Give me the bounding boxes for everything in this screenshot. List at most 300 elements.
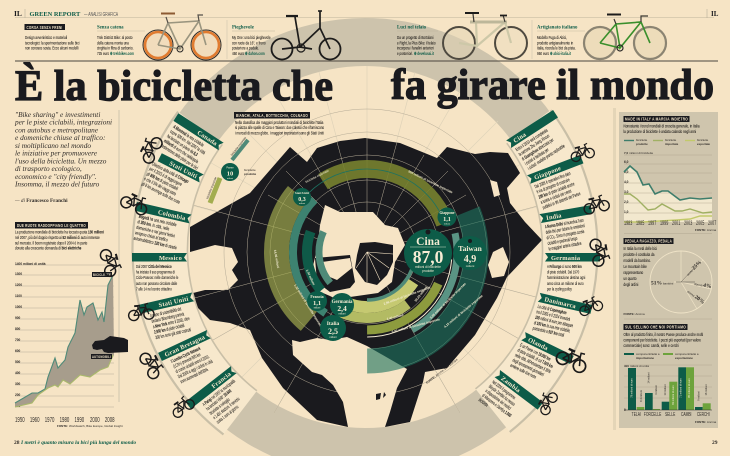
arc: mid teal left [299, 184, 435, 320]
legend for the map arcs: prodotte [244, 172, 256, 176]
arc value labels: 30,23 milioni [414, 285, 428, 303]
production arcs on map [225, 110, 509, 394]
panel: Colombia: domeniche e nei giorni festivi [136, 224, 176, 239]
panel: Giappone [527, 155, 594, 211]
line chart: bicycles vs automobiles: 800 [15, 327, 21, 331]
country circle: Giappone: milioni [444, 224, 451, 226]
header item: Luci nel telaio [397, 26, 438, 56]
header item: Senza catena [97, 26, 145, 56]
country circle: Stati Uniti: Stati Uniti [295, 191, 309, 195]
arc value labels: 2,96 milioni di biciclette esportate [383, 285, 431, 306]
bike: folding black [272, 11, 340, 60]
pie chart: bike types [624, 251, 712, 319]
line chart: Italian production: 2005 [696, 220, 704, 227]
sidebar heading: sul sellino [624, 324, 703, 348]
arc: white line [275, 160, 459, 344]
bar chart: components: 8,4 milioni [639, 390, 643, 402]
label: biciclette [92, 272, 112, 277]
bar chart: components: 14 milioni [646, 372, 650, 383]
panel: India: India [546, 212, 563, 222]
bar chart: components: 300 milioni di unità [624, 364, 649, 368]
pie chart: bike types: 51% bambini [651, 280, 674, 286]
header item: Senza catena: Senza catena [97, 26, 124, 30]
map heading: producers: si piazza alle spalle di Cina e Taiwan: due colossi che riforniscono [235, 124, 325, 130]
khaki ring behind the map [136, 18, 594, 456]
panel: Stati Uniti, Chicago [141, 151, 204, 209]
line chart: bicycles vs automobiles: 500 [15, 360, 21, 364]
sidebar: made in Italy: esportate [697, 142, 710, 146]
map heading: producers [234, 112, 325, 136]
arc: teal right [260, 145, 474, 359]
panel: Stati Uniti, New York: sindaco Bloomberg porterà [151, 311, 185, 324]
map heading: producers: i mercati di mezzo globo. I maggiori importatori sono gli Stati Uniti [235, 130, 324, 136]
header item: Luci nel telaio: e Right, la Plus Bike: il telaio [397, 40, 436, 45]
panel: Danimarca [531, 293, 592, 343]
panel: Giappone: pubblici in 96 distretti del Paese [541, 190, 582, 210]
panel: Canada: copre 500 km. Nel 2007 la città [169, 128, 207, 156]
line chart: bicycles vs automobiles: FONTE: Worldwatch, Bike Europe, Global Insight [57, 424, 123, 428]
bar chart: components: esportazione [675, 356, 693, 360]
chart heading: bikes vs cars [15, 222, 104, 251]
arc: light olive right [274, 159, 460, 345]
country circle: Germania: milioni [338, 312, 346, 316]
legend for the map arcs: Paese [226, 166, 234, 170]
line chart: Italian production: 2003 [684, 220, 692, 227]
sidebar: made in Italy [624, 116, 710, 146]
bike: Trek orange [143, 14, 221, 60]
panel: Stati Uniti, Chicago: Obiettivo della città di Chicago [151, 160, 190, 184]
header item: Senza catena: 725 euro ⊕ trekbikes.com [97, 50, 134, 56]
intro text: Insomma, il mezzo del futuro [14, 180, 100, 188]
panel: Zambia: Bicycle Zambia ha messo [488, 383, 517, 407]
panel: Messico: Messico [159, 255, 182, 262]
sidebar: made in Italy: importate [665, 142, 679, 146]
panel: Cina: la sezione Zhu Jiang Xincun [517, 133, 551, 157]
line chart: Italian production: 1997 [648, 220, 656, 227]
panel: Francia: costa 1 euro al giorno [215, 403, 240, 425]
bar chart: components: 63 milioni di euro [671, 385, 675, 405]
bar chart: components: componenti/telai a [636, 352, 660, 356]
sidebar heading: sul sellino: commerciale) sono: cambi, selle e cerchi [624, 342, 679, 348]
arc value labels [273, 168, 484, 334]
panel: Canada: miliardi di euro che raddoppia [163, 138, 200, 164]
panel: Francia [185, 366, 255, 432]
country circle: Germania [330, 293, 354, 317]
panel: Gran Bretagna: (LCN+) prevede 900 km [172, 351, 201, 369]
panel: Stati Uniti, New York: 2.900 km di piste ciclabili [153, 322, 185, 335]
sidebar heading: pedala ragazzo: degli ordini [624, 281, 638, 287]
panel: Gran Bretagna: di corsie ciclabili entro il 2010. [174, 353, 210, 374]
arc: olive imports left [240, 125, 494, 379]
sidebar: made in Italy: la produzione di biciclette è andata calando negli anni [624, 128, 696, 134]
footer: left page: I metri è quanto misura la bici più lunga del mondo [20, 440, 136, 446]
panel: Germania: l'amministrazione destina ogni [547, 274, 585, 280]
legend for the map arcs: biciclette [244, 168, 256, 172]
map: polar projection [184, 66, 547, 428]
intro text: di trasporto ecologico, [15, 164, 82, 173]
country circle: Germania: 2,4 [337, 304, 347, 313]
bar chart: components: 13 milioni [663, 384, 667, 395]
panel: Giappone: a tutela e ciclisti dei centri [539, 188, 572, 205]
panel: Cina: di Guangzhou attrezzata per [520, 137, 555, 162]
line chart: Italian production: 6,0 [624, 160, 629, 164]
panel: Francia: biciclette a noleggio [208, 396, 231, 416]
panel: Danimarca: 100 milioni di euro per allargare [535, 314, 574, 329]
pie chart: bike types: donna 4% [694, 281, 712, 290]
panel: Olanda: degli spostamenti giornalieri [512, 357, 545, 377]
line chart: Italian production: 1999 [660, 220, 668, 227]
legend for the map arcs: biciclette esportate [230, 135, 247, 157]
header item: Artigianato italiano: Modello Fuga di Abici, [537, 34, 567, 40]
panel: Olanda: Olanda [527, 337, 550, 353]
panel: Colombia: di 300 km. In città, nelle [137, 219, 170, 232]
map heading: producers: Nella classifica dei maggiori produttori mondiali di biciclette l'Italia [235, 119, 324, 125]
panel: Giappone: Giappone [533, 165, 562, 182]
label: automobili [91, 354, 112, 359]
panel: Zambia: Zambia [499, 375, 522, 395]
sidebar heading: pedala ragazzo: prodotte è costituita da [624, 251, 655, 257]
arc value labels: 3,65 milioni di biciclette importate [429, 282, 467, 320]
arc value labels: biciclette esportate [305, 168, 330, 184]
line chart: bicycles vs automobiles: 2000 [90, 417, 100, 424]
map source: FONTE: Ancma, Bike Europe [425, 357, 459, 385]
legend for the map arcs: 10 [227, 170, 233, 178]
line chart: bicycles vs automobiles: 1200 [15, 283, 22, 287]
panel: Stati Uniti, Chicago: per il 2015 è di raggiungere [148, 165, 184, 187]
line chart: Italian production: 5,0 [624, 170, 629, 174]
bar chart: components: 78 milioni di euro [630, 378, 634, 398]
intro text: le iniziative per promuovere [15, 149, 98, 158]
line chart: bicycles vs automobiles: 600 [15, 349, 21, 353]
sidebar heading: pedala ragazzo [624, 238, 674, 287]
panel: Germania: Germania [551, 255, 581, 262]
bar chart: components: TELAI [632, 411, 641, 417]
panel: Gran Bretagna: sono aumentati dell'83% [179, 366, 209, 385]
line chart: bicycles vs automobiles: 1300 [15, 272, 22, 276]
panel: Stati Uniti, Chicago: Stati Uniti [168, 160, 198, 180]
country circle: Italia: Italia [327, 321, 340, 327]
chart heading: bikes vs cars: sul mercato. Il boom registrato dopo il 2004 è in parte [15, 240, 88, 245]
panel: Francia: A Parigi nel 2007 la municipalità [201, 378, 236, 407]
header: top bar: IL [711, 10, 719, 18]
intro text: per le piste ciclabili, integrazioni [14, 118, 112, 127]
header: top bar: — ANALISI GRAFICA [84, 11, 118, 17]
country circle: Francia: Francia [310, 294, 324, 299]
panel: Canada: Canada [196, 129, 219, 148]
sidebar heading: sul sellino: SUL SELLINO CHE NOI PORTIAMO [625, 325, 686, 330]
panel: Giappone: 200 km di piste ciclabili anche [537, 181, 575, 200]
header intro: corsa senza freni [24, 24, 80, 51]
panel: Stati Uniti, Chicago: e che il 5% dei viaggi sotto [143, 175, 178, 197]
panel: Canada: ha lanciato un piano da 8,3 [166, 133, 199, 157]
bar chart: components [624, 352, 717, 424]
country circle: Francia: milioni [314, 308, 321, 310]
chart heading: bikes vs cars: dovuto alla crescente domanda di bici elettriche [15, 245, 81, 251]
sidebar heading: sul sellino: componenti per biciclette. I pezzi più esportati (per valore [624, 337, 702, 343]
bar chart: components: FONTE: Ancma [695, 420, 717, 424]
panel: Stati Uniti, New York: Il piano di sostenibilità del [150, 306, 182, 319]
country circle: Taiwan: 4,9 [464, 254, 476, 265]
bar chart: components: 85 milioni di euro [687, 378, 691, 398]
arc: teal thin right [319, 204, 415, 300]
bar chart: components: CERCHI [697, 411, 710, 417]
chart heading: bikes vs cars: DUE RUOTE RADDOPPIANO LE QUATTRO [17, 223, 86, 228]
sidebar: made in Italy: biciclette [665, 138, 677, 142]
panel: Germania: per la cycling policy [547, 286, 572, 292]
panel: Gran Bretagna: Dal 2003 a oggi i ciclisti in città [177, 358, 214, 379]
header item: Artigianato italiano: prodotto artigianalmente in [537, 40, 573, 45]
line chart: Italian production: 2,0 [624, 200, 629, 204]
sidebar heading: pedala ragazzo: modelli da bambino. [624, 257, 651, 263]
panel: Cina [506, 110, 574, 173]
panel: Colombia: automobilistico 120 km di strade [133, 235, 177, 251]
intro text: l'uso della bicicletta. Un mezzo [15, 156, 107, 165]
panel: Zambia: di Mansonro e Samfya 1.000 [481, 392, 513, 418]
arc: teal left [264, 149, 470, 355]
header item: Artigianato italiano: Italia, ricorda le bici da pista. [537, 45, 576, 51]
line chart: bicycles vs automobiles: 400 [15, 371, 21, 375]
panel: Giappone: è via di progetto di costruire [535, 176, 571, 195]
panel: Danimarca: di 190 km la sua rete ciclabile, [533, 319, 571, 334]
arc value labels: 0,92 milioni di biciclette importate [391, 317, 441, 334]
line chart: bicycles vs automobiles [15, 262, 123, 428]
header item: Luci nel telaio: incorpora i fanalini anteriori [397, 45, 434, 51]
header item: Luci nel telaio: e posteriori. ⊕ develusai.it [397, 50, 434, 56]
country circle: Stati Uniti [293, 188, 311, 206]
arc value labels: 4,15 milioni di biciclette esportate [443, 294, 484, 329]
country circle: Giappone: Giappone [440, 211, 455, 215]
line chart: Italian production: 1985 [636, 220, 644, 227]
line chart: bicycles vs automobiles: 700 [15, 338, 21, 342]
header item: Senza catena: cinghia in fibra di carbonio. [97, 45, 133, 51]
bar chart: components: 16 milioni [704, 384, 708, 395]
legend for the map arcs: milioni [227, 178, 234, 180]
arc: translucent exports right [225, 110, 509, 394]
arc: pale olive right [291, 176, 443, 328]
intro text: economico e "city friendly". [15, 172, 97, 181]
panel: Danimarca: La città di Copenaghen [537, 303, 567, 316]
panel: Stati Uniti, New York: a New York entro il 2030, oltre [152, 315, 190, 330]
country circle: Francia: 1,1 [313, 300, 321, 307]
bar chart: components: FORCELLE [644, 411, 661, 417]
country circle: Italia [320, 315, 346, 341]
header: top bar: GREEN REPORT [30, 11, 81, 18]
country circle: Francia [307, 291, 327, 311]
header item: Artigianato italiano: 950 euro ⊕ abici-italia.it [537, 50, 571, 56]
panel: India: le maggiori arterie cittadine [548, 240, 582, 252]
header item: Luci nel telaio: Da un progetto di Bortolani [397, 34, 434, 40]
panel: India: di CO₂. Sono in progetto corsie [546, 228, 585, 241]
bar chart: components: 9 milioni [696, 391, 700, 401]
panel: Olanda: È un Paese con 19.000 km [519, 342, 552, 362]
panel: Cina: i ciclisti: modello presto replicabile [526, 142, 566, 171]
country circle: Italia: 2,5 [328, 327, 338, 336]
panel: Canada: l'estensione delle piste per le bici [160, 142, 200, 171]
header intro: corsa senza freni: Design avveniristico e materiali [25, 34, 67, 40]
country circle: Taiwan: Taiwan [458, 244, 483, 253]
panel: Colombia: Bogotá ha una rete ciclabile [138, 213, 177, 228]
country circle: Cina: milioni di biciclette [415, 265, 441, 269]
line chart: bicycles vs automobiles: 1000 [15, 305, 22, 309]
bar chart: components: SELLE [665, 411, 675, 417]
header item: Pieghevole: 450 euro ⊕ dahon.com [232, 50, 265, 56]
line chart: bicycles vs automobiles: 100 [15, 404, 21, 408]
line chart: bicycles vs automobiles: 1950 [15, 417, 25, 424]
arc value labels: 550 milioni di biciclette importate [408, 169, 453, 194]
header item: Pieghevole: Pieghevole [232, 26, 254, 30]
line chart: bicycles vs automobiles: 2008 [105, 417, 115, 424]
arc value labels: 14,92 milioni [273, 249, 280, 269]
arc: olive imports top [253, 138, 481, 366]
sidebar: made in Italy: biciclette [636, 138, 648, 142]
country circle: Cina: prodotte [422, 269, 434, 273]
arc value labels: 1,04 milioni [305, 269, 316, 286]
header item: Pieghevole: con ruote da 16", e freno [232, 40, 266, 45]
panel: Danimarca: Danimarca [544, 296, 577, 310]
country circle: Cina [404, 229, 452, 277]
panel: Germania [545, 253, 600, 292]
line chart: bicycles vs automobiles: 1970 [45, 417, 54, 424]
country circle: Italia: milioni [329, 335, 337, 339]
legend for the map arcs: biciclette importate [205, 176, 218, 199]
panel: Francia: e 1.451 stazioni. Il servizio [211, 395, 241, 420]
intro text: "Bike sharing" e investimenti [15, 110, 100, 119]
country circle: Taiwan: milioni [466, 264, 475, 268]
panel: Messico: Ciclo-Paseos: nelle domeniche le [136, 274, 179, 280]
header: top bar [14, 9, 719, 61]
panel band: right fan [476, 110, 598, 432]
sidebar: made in Italy: MADE IN ITALY A MARCIA INDIETRO [625, 117, 688, 122]
pie chart: bike types: FONTE: Ancma [624, 312, 645, 316]
panel: India: A Nuova Delhi si incentiva l'uso [544, 217, 584, 230]
intro text: con autobus e metropolitane [15, 126, 99, 134]
bike: green frame [584, 14, 666, 59]
arc: thin teal line [250, 135, 484, 369]
panel: Colombia: Colombia [157, 209, 187, 222]
bike: light frame [443, 13, 527, 59]
line chart: bicycles vs automobiles: 1980 [60, 417, 69, 424]
panel: Olanda: di piste ciclabili, di cui 7.000 km [517, 347, 554, 369]
country circle: Cina: Cina [416, 236, 440, 248]
sidebar: made in Italy: prodotte [636, 142, 648, 146]
panel: Colombia [128, 202, 192, 252]
header item: Pieghevole: posteriore a pedale. [232, 45, 259, 51]
label: biciclette: BICICLETTE [93, 273, 111, 277]
chart heading: bikes vs cars: nel 2007, più del doppio rispetto ai 52 milioni di auto immesse [15, 234, 100, 240]
panel: Cina: i ciclisti e facilitata per [523, 146, 550, 167]
country circle: Giappone: 1,1 [443, 216, 451, 223]
intro text: e domeniche chiuse al traffico: [15, 133, 105, 142]
line chart: bicycles vs automobiles: 300 [15, 382, 21, 386]
header item: Pieghevole [232, 26, 275, 56]
panel: Zambia: a disposizione dei medici [484, 388, 513, 411]
line chart: Italian production: 4,0 [624, 180, 629, 184]
panel: Cina: Entro il 2010 sarà completata [514, 127, 549, 152]
line chart: Italian production: FONTE: Ancma [695, 228, 717, 232]
line chart: Italian production [624, 151, 717, 234]
arc value labels: 1,32 milioni di biciclette importate [293, 283, 323, 328]
panel: Stati Uniti, New York [139, 292, 201, 342]
sidebar heading: pedala ragazzo: un quarto [624, 275, 637, 281]
panel: Zambia [477, 370, 543, 433]
header item: Artigianato italiano: Artigianato italiano [537, 26, 578, 30]
country circle: Germania: Germania [332, 300, 353, 305]
panel: Giappone: Dal 2008 è operativo fino dato [533, 170, 572, 189]
panel: Stati Uniti, Chicago: gli 800 km di piste ciclabili [146, 170, 179, 191]
panel: Gran Bretagna: Il London Cycle Network [170, 345, 201, 364]
line chart: bicycles vs automobiles: 900 [15, 316, 21, 320]
panel: Messico: ha iniziato il suo programma di [136, 269, 175, 275]
header item: Senza catena: Trek District Bike: al posto [97, 34, 133, 40]
title: fa girare il mondo [391, 62, 714, 109]
map heading: producers: BIANCHI, ATALA, BOTTECCHIA, COLNAGO [236, 113, 308, 118]
sidebar heading: pedala ragazzo: In Italia la metà delle bici [624, 245, 657, 251]
line chart: bicycles vs automobiles: 200 [15, 393, 21, 397]
bar chart: components: importazione [636, 356, 654, 360]
panel: Olanda: avviene sulle due ruote [509, 362, 537, 380]
panel: Cina: Cina [512, 131, 528, 145]
footer: left page: 28 [14, 440, 20, 446]
line chart: bicycles vs automobiles: 1400 milioni di unità [15, 262, 46, 266]
line chart: bicycles vs automobiles: 1990 [75, 417, 84, 424]
panel: Messico: Dal 2007 Città del Messico [136, 263, 172, 269]
panel: Colombia: vengono chiusi al traffico [134, 229, 169, 243]
panel: Olanda: nelle città. All'Amsterdam il 35% [514, 352, 552, 375]
panel: Francia: ha lanciato Vélib': 20.600 [204, 388, 233, 412]
country circle: Cina: 87,0 [413, 247, 444, 267]
panel: Germania: di piste ciclabili. Dal 1970 [547, 269, 580, 275]
sidebar heading: pedala ragazzo: Le mountain bike [624, 263, 647, 269]
panel: Messico [132, 253, 187, 292]
panel: Gran Bretagna [158, 330, 223, 388]
panel: Germania: A Friburgo ci sono 500 km [547, 263, 582, 269]
intro text: si moltiplicano nel mondo [15, 141, 91, 150]
icon: bikes around the fan [119, 133, 611, 419]
panel: Messico: 7 alle 14 nel centro cittadino [136, 286, 172, 292]
pie chart: bike types: donna 20% [686, 289, 706, 306]
byline: — di Francesco Franchi [14, 198, 68, 204]
line chart: bicycles vs automobiles: 1100 [15, 294, 22, 298]
header: top bar: IL [14, 9, 22, 18]
icon: chart bicycle [99, 247, 123, 278]
chart heading: bikes vs cars: La produzione mondiale di biciclette ha toccato quota 130 milioni [15, 229, 104, 235]
sidebar heading: pedala ragazzo: rappresentano [624, 269, 644, 275]
country circle: Stati Uniti: milioni [299, 203, 306, 205]
footer: right page number: 29 [712, 440, 718, 446]
panel: Danimarca: portandola a 507 km totali [532, 325, 565, 338]
country circle: Stati Uniti: 0,3 [298, 197, 306, 203]
bar chart: components: 0 [624, 408, 626, 412]
panel: Germania: anno circa un milione di euro [547, 280, 584, 286]
bar chart: components: componenti/telai a [675, 352, 699, 356]
bar chart: components: CAMBI [681, 411, 691, 417]
header item: Senza catena: della catena monta una [97, 40, 129, 45]
sidebar: made in Italy: Nonostante i trend mondiali di crescita generale, in Italia [624, 123, 700, 129]
title [15, 62, 714, 110]
line chart: Italian production: 1,0 [624, 210, 629, 214]
sidebar heading: sul sellino: Oltre al prodotto finito, il nostro Paese produce anche molti [624, 331, 703, 337]
panel: Canada [157, 113, 224, 175]
header item: Luci nel telaio: Luci nel telaio [397, 26, 427, 30]
bar chart: components: 3 milioni [654, 385, 658, 395]
line chart: Italian production: 3,0 [624, 190, 629, 194]
arc: olive right [264, 149, 470, 355]
header item: Artigianato italiano [537, 26, 585, 56]
panel: Stati Uniti, New York: Stati Uniti [158, 296, 189, 309]
sidebar background [613, 108, 718, 430]
label: automobili: AUTOMOBILI [92, 355, 111, 359]
panel band: left fan [132, 112, 257, 434]
